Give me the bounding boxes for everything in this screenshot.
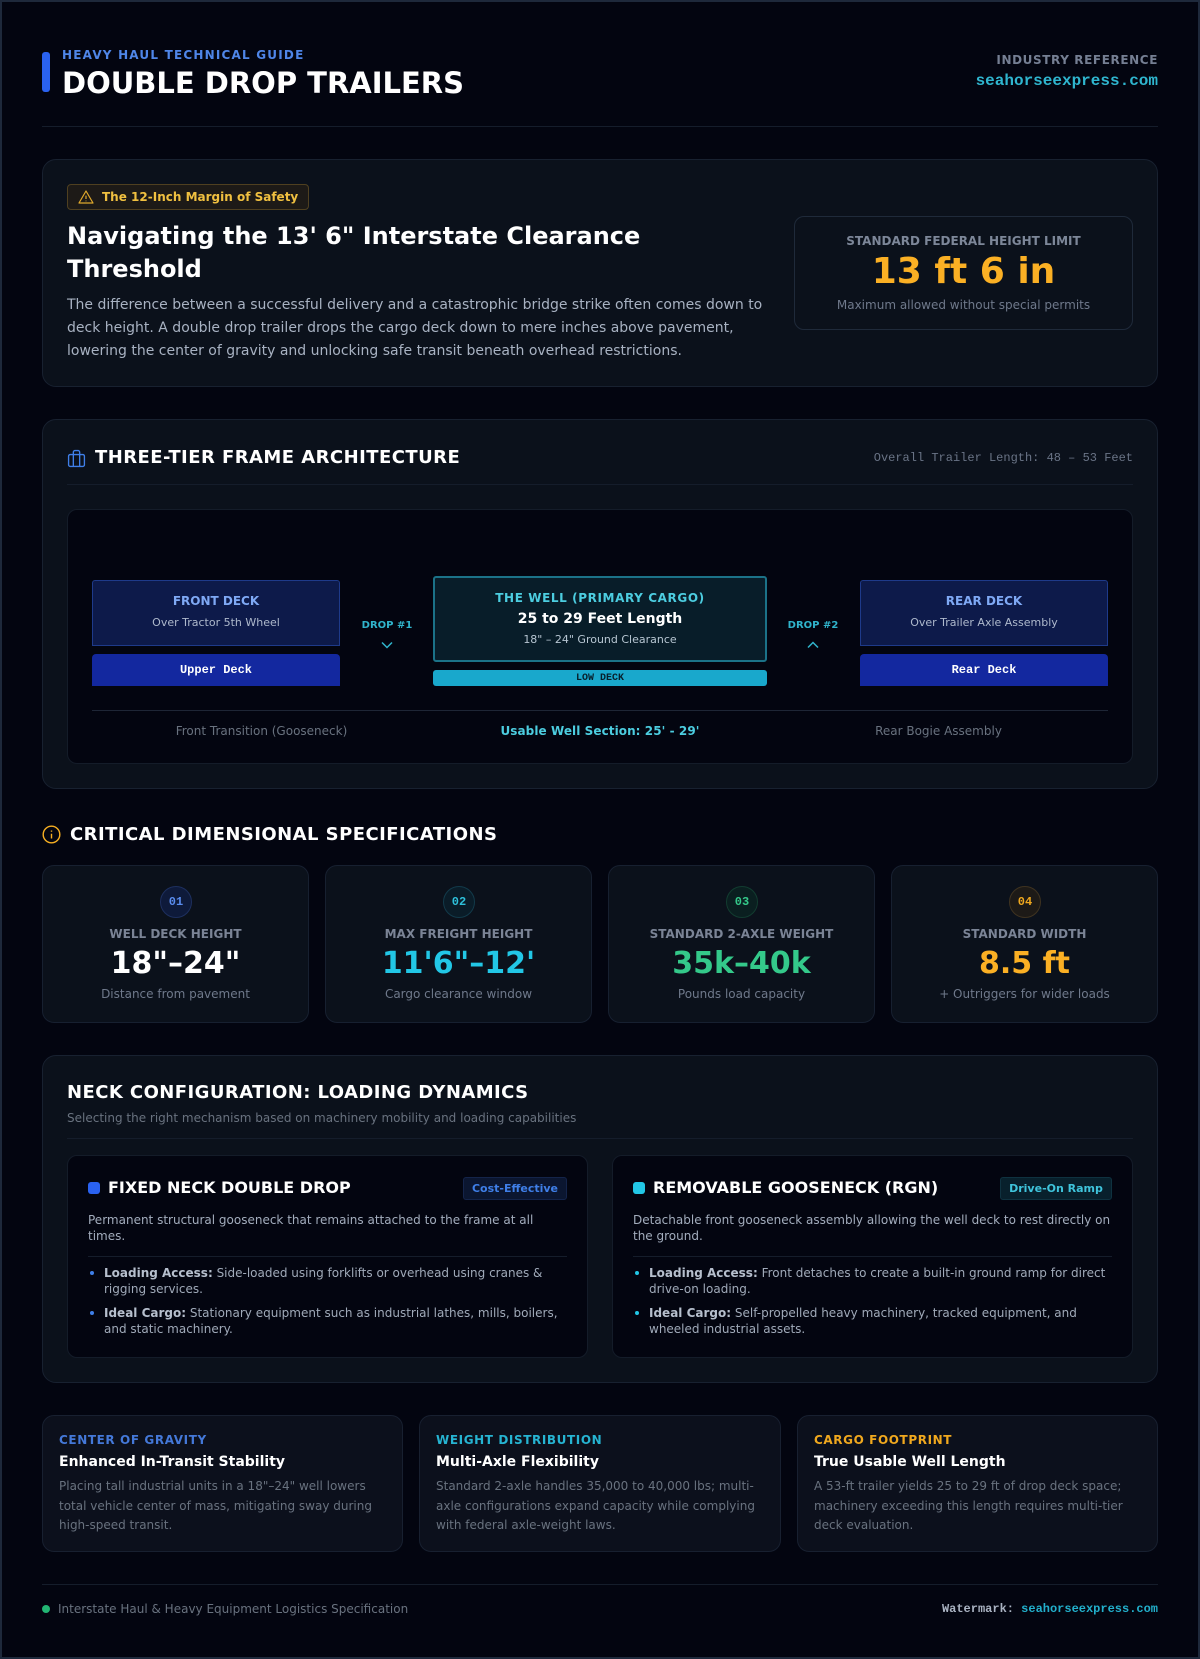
neck subtitle: Selecting the right mechanism based on machinery mobility and loading capabilities bbox=[67, 1111, 576, 1125]
spec value: 8.5 ft bbox=[979, 946, 1070, 981]
info text: Placing tall industrial units in a 18"–24" well lowers bbox=[59, 1479, 366, 1493]
section heading: architecture: THREE-TIER FRAME ARCHITECTURE bbox=[95, 447, 460, 468]
watermark: Watermark: seahorseexpress.com bbox=[942, 1602, 1158, 1616]
info text bbox=[814, 1479, 1123, 1532]
bullet: loading access bbox=[90, 1266, 542, 1296]
cyan marker bbox=[633, 1182, 645, 1194]
spec card 3 bbox=[608, 865, 875, 1023]
section heading: neck: NECK CONFIGURATION: LOADING DYNAMICS bbox=[67, 1082, 529, 1103]
info text: machinery exceeding this length requires multi-tier bbox=[814, 1498, 1123, 1512]
bullet: ideal cargo: Ideal Cargo: Self-propelled heavy machinery, tracked equipment, and bbox=[649, 1306, 1077, 1320]
spec note: Distance from pavement bbox=[101, 987, 250, 1001]
info text: Standard 2-axle handles 35,000 to 40,000 lbs; multi- bbox=[436, 1479, 754, 1493]
footer text: Interstate Haul & Heavy Equipment Logistics Specification bbox=[58, 1602, 408, 1616]
usable well label: Usable Well Section: 25' - 29' bbox=[500, 724, 700, 738]
spec label: WELL DECK HEIGHT bbox=[109, 927, 242, 941]
upper deck bar bbox=[92, 654, 340, 686]
front deck box bbox=[92, 580, 340, 646]
bullet: loading access: drive-on loading. bbox=[649, 1282, 751, 1296]
card: fixed neck bbox=[67, 1155, 588, 1358]
info label: WEIGHT DISTRIBUTION bbox=[436, 1433, 602, 1447]
fixed neck description: times. bbox=[88, 1229, 125, 1243]
callout value: 13 ft 6 in bbox=[872, 251, 1055, 292]
info text: with federal axle-weight laws. bbox=[436, 1518, 616, 1532]
title: DOUBLE DROP TRAILERS bbox=[62, 66, 464, 100]
bullet: loading access: rigging services. bbox=[104, 1282, 203, 1296]
footer bbox=[42, 1602, 1158, 1616]
well length: 25 to 29 Feet Length bbox=[518, 611, 682, 627]
bullet: ideal cargo: Ideal Cargo: Stationary equipment such as industrial lathes, mills, boilers, bbox=[104, 1306, 558, 1320]
blue marker bbox=[88, 1182, 100, 1194]
callout label: STANDARD FEDERAL HEIGHT LIMIT bbox=[846, 234, 1081, 248]
badge text: The 12-Inch Margin of Safety bbox=[102, 190, 298, 204]
number 02: 02 bbox=[452, 895, 466, 909]
header bbox=[42, 48, 1158, 100]
card: removable gooseneck bbox=[612, 1155, 1133, 1358]
cost badge: Cost-Effective bbox=[472, 1182, 558, 1195]
ramp badge: Drive-On Ramp bbox=[1009, 1182, 1103, 1195]
drop 1 label: DROP #1 bbox=[362, 620, 412, 631]
number 02 bbox=[443, 886, 475, 918]
icon: warning triangle bbox=[78, 190, 94, 204]
info title: Enhanced In-Transit Stability bbox=[59, 1454, 285, 1470]
icon: info circle bbox=[42, 826, 60, 844]
rgn title: REMOVABLE GOOSENECK (RGN) bbox=[653, 1178, 938, 1197]
section heading: specifications: CRITICAL DIMENSIONAL SPECIFICATIONS bbox=[70, 824, 497, 845]
bullet: ideal cargo bbox=[635, 1306, 1077, 1336]
front deck note: Over Tractor 5th Wheel bbox=[152, 616, 280, 629]
status dot bbox=[42, 1605, 50, 1613]
spec note: Cargo clearance window bbox=[385, 987, 532, 1001]
bullet: loading access bbox=[635, 1266, 1106, 1296]
accent bar bbox=[42, 52, 50, 92]
front transition label: Front Transition (Gooseneck) bbox=[176, 724, 347, 738]
info card: cargo footprint bbox=[797, 1415, 1158, 1552]
spec card 4 bbox=[891, 865, 1158, 1023]
spec note: + Outriggers for wider loads bbox=[939, 987, 1110, 1001]
overall length note: Overall Trailer Length: 48 – 53 Feet bbox=[874, 451, 1133, 465]
info label: CARGO FOOTPRINT bbox=[814, 1433, 952, 1447]
rear deck note: Over Trailer Axle Assembly bbox=[910, 616, 1058, 629]
rear deck bar bbox=[860, 654, 1108, 686]
spec card 2 bbox=[325, 865, 592, 1023]
info text bbox=[436, 1479, 755, 1532]
number 04: 04 bbox=[1018, 895, 1032, 909]
info title: True Usable Well Length bbox=[814, 1454, 1006, 1470]
panel: clearance hero bbox=[42, 159, 1158, 387]
spec value: 18"–24" bbox=[111, 946, 240, 981]
website: seahorseexpress.com bbox=[976, 72, 1158, 90]
number 03: 03 bbox=[735, 895, 749, 909]
hero heading: Navigating the 13' 6" Interstate Clearance bbox=[67, 222, 640, 250]
spec value: 35k–40k bbox=[672, 946, 811, 981]
fixed neck description: Permanent structural gooseneck that remains attached to the frame at all bbox=[88, 1213, 533, 1227]
hero heading: Threshold bbox=[67, 255, 202, 283]
info title: Multi-Axle Flexibility bbox=[436, 1454, 599, 1470]
hero paragraph bbox=[66, 297, 762, 359]
info text: total vehicle center of mass, mitigating sway during bbox=[59, 1498, 372, 1512]
low deck bar bbox=[433, 670, 767, 686]
info text: high-speed transit. bbox=[59, 1518, 172, 1532]
spec note: Pounds load capacity bbox=[678, 987, 805, 1001]
number 04 bbox=[1009, 886, 1041, 918]
spec label: MAX FREIGHT HEIGHT bbox=[385, 927, 532, 941]
hero paragraph: lowering the center of gravity and unlocking safe transit beneath overhead restrictions. bbox=[67, 343, 682, 359]
rear deck box bbox=[860, 580, 1108, 646]
callout note: Maximum allowed without special permits bbox=[837, 298, 1090, 312]
info text: A 53-ft trailer yields 25 to 29 ft of drop deck space; bbox=[814, 1479, 1121, 1493]
panel: neck configuration bbox=[42, 1055, 1158, 1383]
eyebrow: HEAVY HAUL TECHNICAL GUIDE bbox=[62, 48, 304, 62]
number 03 bbox=[726, 886, 758, 918]
icon: chevron down bbox=[382, 642, 392, 648]
bullet: loading access: Loading Access: Front detaches to create a built-in ground ramp for direct bbox=[649, 1266, 1105, 1280]
bullet: loading access: Loading Access: Side-loaded using forklifts or overhead using cranes & bbox=[104, 1266, 542, 1280]
fixed neck description bbox=[88, 1213, 533, 1243]
bullet: ideal cargo bbox=[90, 1306, 558, 1336]
well title: THE WELL (PRIMARY CARGO) bbox=[495, 591, 705, 605]
number 01: 01 bbox=[169, 895, 183, 909]
spec card 1 bbox=[42, 865, 309, 1023]
spec value: 11'6"–12' bbox=[382, 946, 535, 981]
rgn description bbox=[633, 1213, 1110, 1243]
spec label: STANDARD 2-AXLE WEIGHT bbox=[650, 927, 833, 941]
icon: frame case bbox=[68, 450, 86, 468]
low deck bar: LOW DECK bbox=[576, 673, 624, 684]
info card: weight distribution bbox=[419, 1415, 781, 1552]
number 01 bbox=[160, 886, 192, 918]
info card: center of gravity bbox=[42, 1415, 403, 1552]
hero paragraph: deck height. A double drop trailer drops the cargo deck down to mere inches above pavement, bbox=[67, 320, 734, 336]
rgn description: the ground. bbox=[633, 1229, 703, 1243]
upper deck bar: Upper Deck bbox=[180, 663, 252, 677]
bullet: ideal cargo: and static machinery. bbox=[104, 1322, 233, 1336]
drop 2 label: DROP #2 bbox=[788, 620, 838, 631]
front deck title: FRONT DECK bbox=[173, 594, 259, 608]
bullet: ideal cargo: wheeled industrial assets. bbox=[649, 1322, 805, 1336]
rear bogie label: Rear Bogie Assembly bbox=[875, 724, 1002, 738]
rgn description: Detachable front gooseneck assembly allowing the well deck to rest directly on bbox=[633, 1213, 1110, 1227]
height limit callout bbox=[794, 216, 1133, 330]
info text: axle configurations expand capacity while complying bbox=[436, 1498, 755, 1512]
drop 1 marker bbox=[362, 620, 412, 648]
info label: CENTER OF GRAVITY bbox=[59, 1433, 207, 1447]
ramp badge bbox=[1000, 1177, 1112, 1200]
fixed neck title: FIXED NECK DOUBLE DROP bbox=[108, 1178, 351, 1197]
safety badge bbox=[67, 184, 309, 210]
rear deck bar: Rear Deck bbox=[952, 663, 1016, 677]
info text bbox=[59, 1479, 372, 1532]
rear deck title: REAR DECK bbox=[946, 594, 1022, 608]
drop 2 marker bbox=[788, 620, 838, 648]
hero heading bbox=[67, 222, 640, 283]
diagram: three tier frame bbox=[67, 509, 1133, 764]
well clearance: 18" – 24" Ground Clearance bbox=[523, 633, 677, 646]
icon: chevron up bbox=[808, 642, 818, 648]
well box bbox=[433, 576, 767, 662]
hero paragraph: The difference between a successful delivery and a catastrophic bridge strike often comes down to bbox=[67, 297, 762, 313]
info text: deck evaluation. bbox=[814, 1518, 913, 1532]
panel: frame architecture bbox=[42, 419, 1158, 789]
cost badge bbox=[463, 1177, 567, 1200]
industry reference label: INDUSTRY REFERENCE bbox=[996, 53, 1158, 67]
spec label: STANDARD WIDTH bbox=[963, 927, 1086, 941]
